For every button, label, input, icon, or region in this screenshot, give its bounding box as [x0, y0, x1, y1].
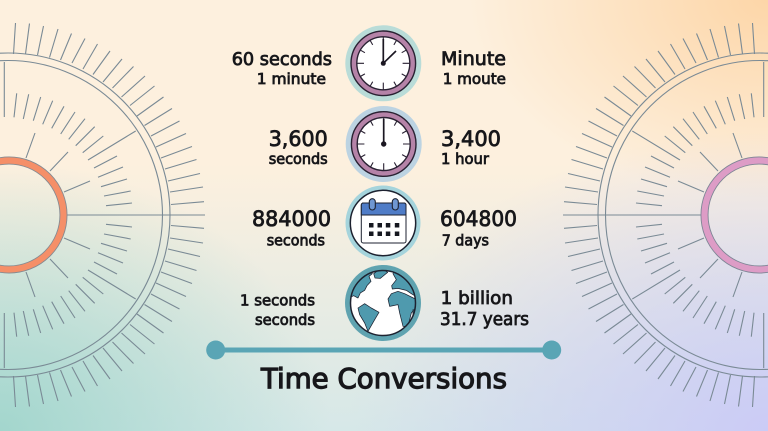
row 3 left text: seconds — [267, 232, 325, 250]
row 4 right text: 31.7 years — [440, 309, 529, 330]
row 3 left text: 884000 — [252, 207, 331, 231]
row 4 right text — [440, 288, 529, 330]
icon: globe — [345, 265, 421, 341]
row 1 left text: 60 seconds — [232, 49, 332, 70]
row 4 left text: 1 seconds — [240, 292, 315, 310]
icon: calendar — [346, 186, 420, 260]
row 2 right text — [441, 127, 501, 168]
left dial — [0, 23, 205, 407]
row 3 right text — [440, 207, 517, 250]
row 3 left text — [252, 207, 331, 250]
row 1 right text: 1 moute — [443, 70, 506, 88]
row 3 right text: 7 days — [442, 232, 489, 250]
title: Time Conversions — [260, 363, 507, 395]
icon: clock twelve o'clock — [346, 106, 422, 182]
row 1 right text — [441, 49, 506, 88]
icon: clock one o'clock — [345, 25, 421, 101]
row 1 right text: Minute — [441, 49, 506, 70]
row 2 right text: 1 hour — [441, 150, 490, 168]
row 2 right text: 3,400 — [441, 127, 501, 151]
row 1 left text — [232, 49, 332, 88]
row 4 left text: seconds — [255, 311, 315, 329]
row 2 left text: seconds — [269, 150, 328, 168]
row 1 left text: 1 minute — [257, 70, 326, 88]
row 2 left text — [269, 127, 328, 168]
row 4 right text: 1 billion — [441, 288, 513, 309]
right dial — [563, 23, 768, 407]
row 2 left text: 3,600 — [269, 127, 328, 151]
connector line with end dots — [206, 340, 561, 360]
row 4 left text — [240, 292, 315, 329]
row 3 right text: 604800 — [440, 207, 517, 231]
